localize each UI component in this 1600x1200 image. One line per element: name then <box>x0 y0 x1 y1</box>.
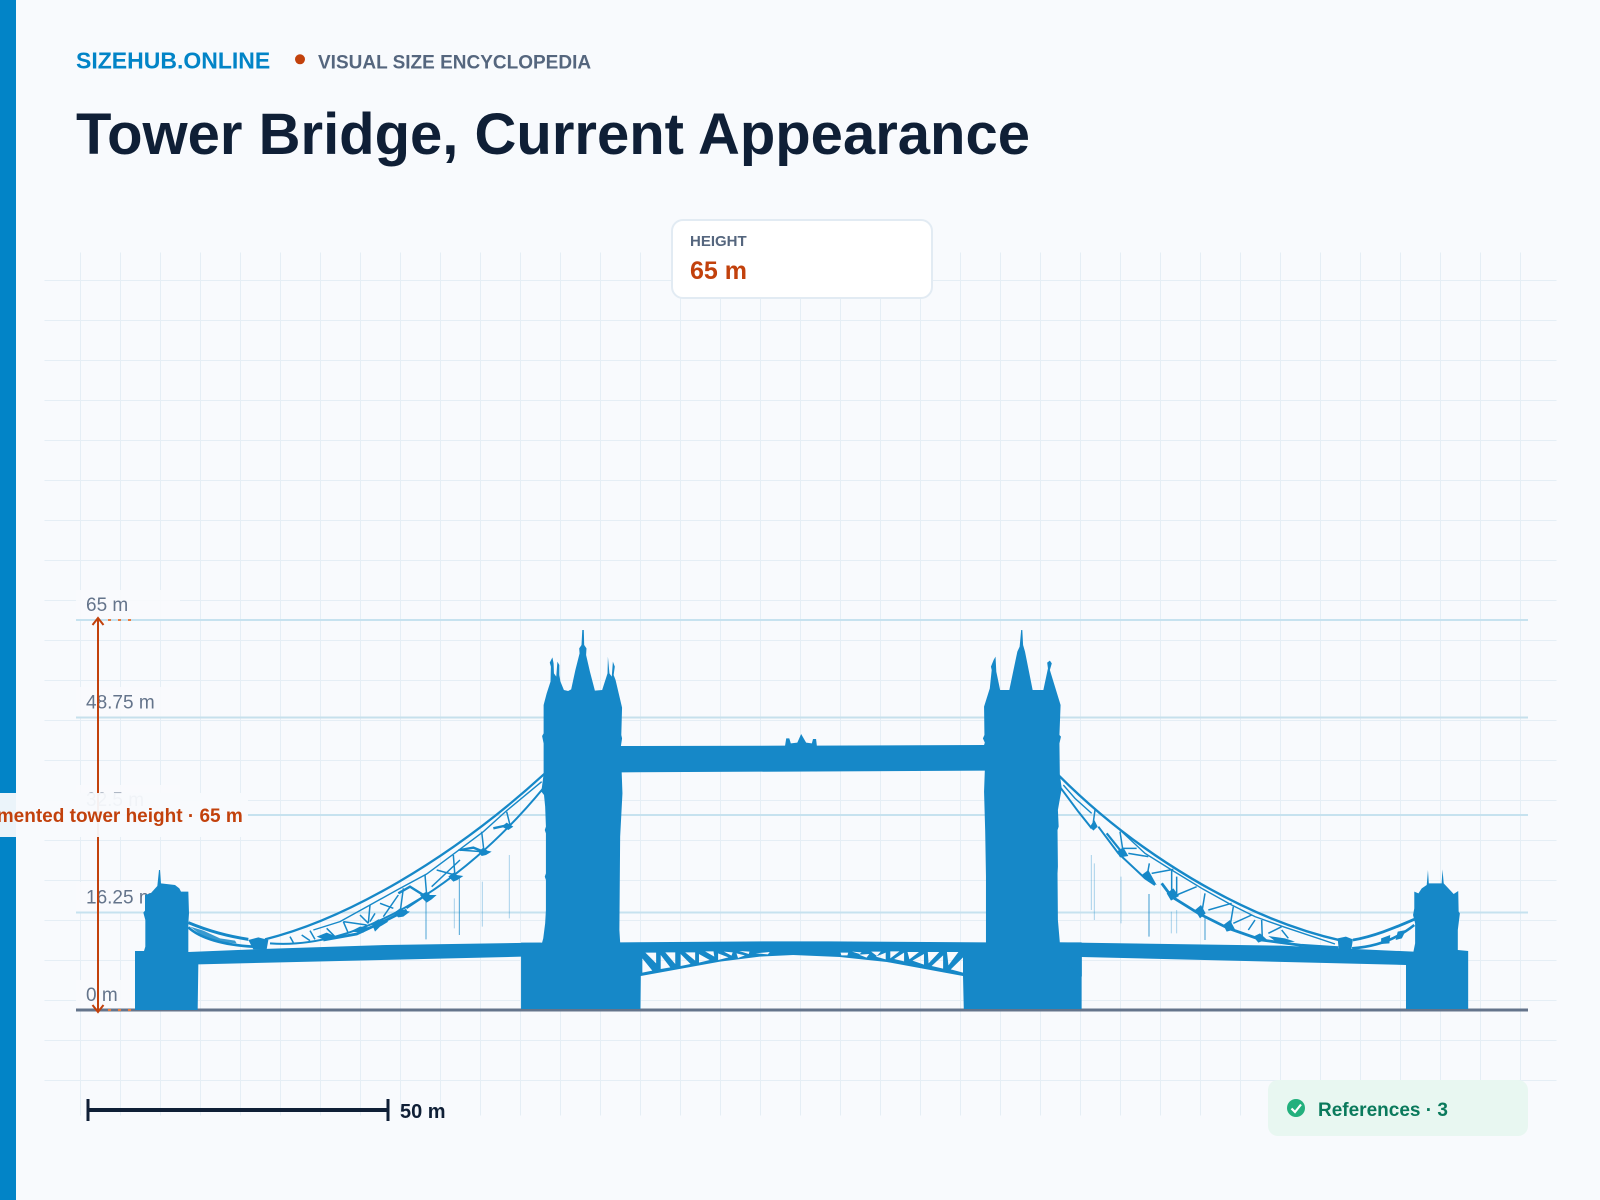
axis labels: 65 m <box>86 595 128 616</box>
axis labels: 48.75 m <box>86 692 155 714</box>
brand line: VISUAL SIZE ENCYCLOPEDIA <box>318 52 591 74</box>
title: Tower Bridge, Current Appearance <box>76 102 1030 167</box>
references badge <box>1268 1080 1528 1136</box>
dimension arrow: tower height <box>92 618 132 1012</box>
bridge silhouette <box>135 630 1468 1010</box>
axis labels: 0 m <box>86 985 118 1006</box>
axis labels <box>86 595 155 1006</box>
right large cable truss <box>1059 776 1342 948</box>
brand line <box>76 48 591 74</box>
main towers, walkway, central span <box>521 630 1082 1009</box>
height card: HEIGHT <box>690 233 747 250</box>
left side tower and deck <box>135 870 541 1010</box>
height card <box>672 220 932 298</box>
references badge: References · 3 <box>1318 1100 1448 1121</box>
axis labels: 16.25 m <box>86 888 155 908</box>
left accent bar <box>0 0 16 1200</box>
axis reference lines <box>76 590 1528 1010</box>
scale bar: 50 m <box>400 1101 446 1123</box>
callout: documented tower height <box>0 793 248 837</box>
height card: 65 m <box>690 257 747 285</box>
brand line: SIZEHUB.ONLINE <box>76 48 270 74</box>
left large cable truss <box>265 773 545 944</box>
axis labels: 32.5 m <box>86 790 144 811</box>
right side tower and deck <box>1060 869 1468 1009</box>
